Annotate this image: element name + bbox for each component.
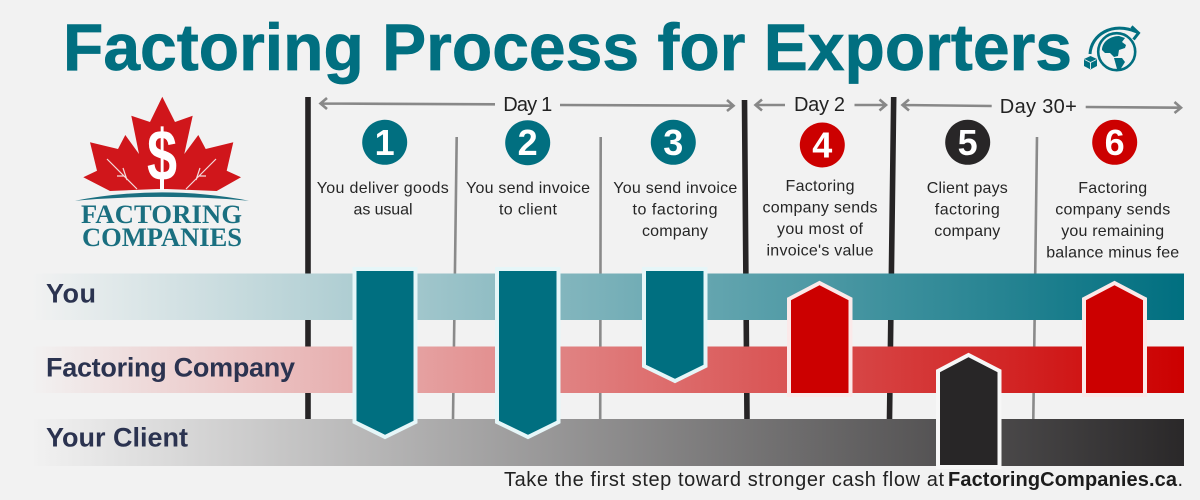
- timeline header: Day 30+: [902, 96, 1181, 118]
- logo wordmark: FACTORING: [81, 199, 242, 229]
- step 6 text: Factoring: [1078, 180, 1147, 197]
- arrow 6: Factoring Company to You: [1084, 283, 1145, 395]
- step 5 text: [927, 180, 1008, 240]
- footer call to action: FactoringCompanies.ca: [948, 469, 1178, 491]
- step 5 text: Client pays: [927, 180, 1008, 197]
- step 2 text: You send invoice: [466, 180, 590, 197]
- arrow 5: Your Client to Factoring Company: [938, 355, 1000, 467]
- step 1 text: as usual: [354, 202, 412, 218]
- step 4 text: [762, 178, 878, 260]
- lane bar: Your Client: [24, 419, 1184, 466]
- step 2: [466, 120, 590, 218]
- step 6: [1046, 120, 1179, 262]
- timeline header: Day 2: Day 2: [794, 94, 845, 116]
- step 3 text: You send invoice: [613, 180, 737, 197]
- step 5 text: company: [934, 223, 1000, 240]
- logo wordmark: [81, 199, 242, 252]
- step 4 text: invoice's value: [766, 242, 874, 260]
- footer call to action: Take the first step toward stronger cash flow at: [504, 469, 944, 491]
- step 6 text: you remaining: [1061, 223, 1164, 240]
- badge 2: 2: [518, 122, 538, 163]
- icon: maple leaf: [83, 97, 241, 191]
- badge 5: 5: [958, 122, 978, 163]
- step 6 text: [1046, 180, 1179, 262]
- icon: leaf veins: [107, 159, 216, 189]
- step 3 text: to factoring: [632, 202, 718, 218]
- arrow 2: You to Your Client: [497, 269, 558, 437]
- step 5 text: factoring: [935, 202, 1000, 218]
- step 1: [317, 120, 449, 218]
- footer call to action: .: [1178, 469, 1183, 491]
- step 1 text: [317, 180, 449, 218]
- lane label: You: You: [46, 278, 96, 308]
- step 3 text: company: [642, 223, 708, 240]
- icon: dollar sign: $: [147, 116, 177, 196]
- arrow 3: You to Factoring Company: [644, 269, 706, 381]
- lane label: Your Client: Your Client: [46, 423, 188, 453]
- arrow 4: Factoring Company to You: [789, 283, 850, 395]
- step 4 text: company sends: [762, 200, 878, 216]
- title: Factoring Process for Exporters: [63, 10, 1072, 84]
- logo arc: [75, 192, 249, 201]
- logo wordmark: COMPANIES: [82, 222, 242, 252]
- badge 6: 6: [1105, 122, 1125, 163]
- badge 6: [1092, 120, 1137, 165]
- lane bar: You: [30, 274, 1184, 320]
- step 1 text: You deliver goods: [317, 180, 449, 197]
- badge 3: 3: [663, 122, 683, 163]
- step 6 text: balance minus fee: [1046, 244, 1179, 262]
- step 4 text: you most of: [777, 221, 864, 238]
- step 3: [613, 120, 737, 240]
- timeline header: Day 2: [756, 94, 886, 116]
- timeline header: Day 1: [320, 94, 734, 116]
- arrow 1: You to Your Client: [354, 269, 416, 437]
- logo: Factoring Companies: [75, 97, 249, 252]
- timeline header: Day 30+: Day 30+: [1000, 96, 1077, 118]
- step 5: [927, 120, 1008, 240]
- footer call to action: [504, 469, 1183, 491]
- badge 1: 1: [375, 122, 395, 163]
- step 2 text: [466, 180, 590, 218]
- step 2 text: to client: [499, 202, 558, 218]
- lane label: Factoring Company: Factoring Company: [46, 353, 295, 383]
- icon: globe with arrow and box: [1084, 26, 1138, 70]
- day dividers: [308, 97, 1037, 419]
- lane bar: Factoring Company: [30, 346, 1184, 393]
- badge 4: 4: [812, 124, 832, 166]
- step 4 text: Factoring: [786, 178, 854, 195]
- step 3 text: [613, 180, 737, 240]
- step 6 text: company sends: [1055, 202, 1170, 218]
- step 4: [762, 122, 878, 260]
- timeline header: Day 1: Day 1: [503, 94, 552, 116]
